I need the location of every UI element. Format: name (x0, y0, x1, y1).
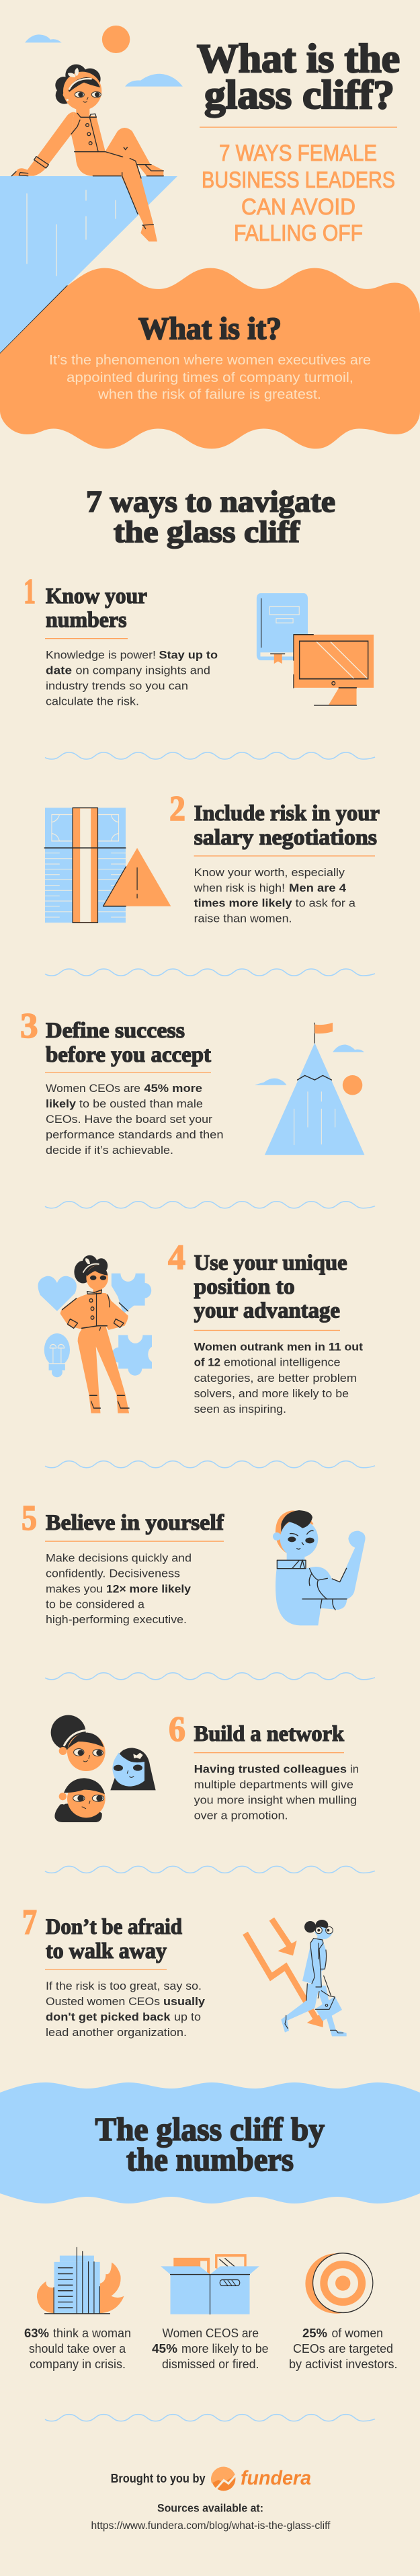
body 5: to be considered a (46, 1598, 145, 1610)
number 3: 3 (20, 1007, 38, 1046)
icon: burning building (37, 2247, 124, 2314)
item 3 (20, 1007, 364, 1157)
logo: fundera (211, 2467, 311, 2491)
heading 7 (46, 1915, 182, 1963)
body 2: raise than women. (194, 912, 292, 925)
body 1: calculate the risk. (46, 695, 139, 707)
body 5: 12× more likely (106, 1582, 192, 1595)
heading 4 (194, 1251, 347, 1323)
body 1: date (46, 664, 72, 676)
heading 4: position to (194, 1275, 295, 1299)
stat text (152, 2327, 269, 2371)
heading 7: to walk away (46, 1939, 167, 1963)
stat text: CEOs are targeted (293, 2342, 393, 2355)
title (197, 36, 400, 117)
face: top woman (51, 1715, 106, 1771)
definition text: appointed during times of company turmoil, (67, 370, 353, 385)
illustration: glass cliff (0, 176, 177, 354)
header illustration: sky (25, 26, 183, 87)
body 5: confidently. Decisiveness (46, 1567, 180, 1579)
panel: glass cliff by the numbers (0, 2082, 420, 2203)
item 1 (24, 572, 374, 707)
heading 4: Use your unique (194, 1251, 347, 1276)
heading 1 (46, 584, 147, 632)
heading: 7 ways (86, 484, 335, 549)
body 6 (194, 1763, 359, 1822)
stat text: by activist investors. (289, 2357, 398, 2371)
illustration: confident woman with puzzle pieces (38, 1255, 152, 1413)
body 4: solvers, and more likely to be (194, 1387, 349, 1400)
stat: 25 percent (289, 2253, 398, 2371)
stat text: more likely to be (181, 2342, 269, 2355)
body 3: decide if it’s achievable. (46, 1144, 173, 1157)
stat text (24, 2327, 131, 2371)
heading 2 (194, 802, 380, 850)
body 6: over a promotion. (194, 1809, 288, 1822)
blue wavy band (0, 2082, 420, 2203)
stat text (289, 2327, 398, 2371)
sources label: Sources available at: (157, 2501, 263, 2514)
body 1: on company insights and (75, 664, 210, 676)
stat: 45 percent (152, 2254, 269, 2371)
icon: left cloud (25, 34, 62, 42)
heading 3 (46, 1019, 211, 1067)
body 4: seen as inspiring. (194, 1403, 286, 1415)
body 3: likely (46, 1097, 77, 1110)
body 1 (46, 648, 218, 707)
body 7: Ousted women CEOs (46, 1995, 160, 2008)
illustration: woman sitting on cliff (11, 65, 163, 241)
body 2: Men are 4 (289, 882, 347, 894)
body 3: to be ousted than male (79, 1097, 203, 1110)
body 4: Women outrank men in 11 out (194, 1341, 363, 1353)
illustration: flexing woman (273, 1510, 366, 1625)
body 7: If the risk is too great, say so. (46, 1980, 202, 1992)
heading 4: your advantage (194, 1299, 340, 1323)
body 6: Having trusted colleagues (194, 1763, 347, 1776)
item 4 (38, 1239, 363, 1415)
body 3: CEOs. Have the board set your (46, 1113, 212, 1126)
number 2: 2 (169, 789, 185, 828)
subtitle: FALLING OFF (234, 221, 363, 246)
icon: sun (102, 26, 130, 53)
heading 1: numbers (46, 608, 127, 632)
body 4: of 12 (194, 1356, 220, 1368)
heading 2: salary negotiations (194, 826, 377, 850)
number 4: 4 (168, 1239, 185, 1278)
sources url: https://www.fundera.com/blog/what-is-the-glass-cliff (91, 2520, 331, 2532)
icon: paycheck and warning sign (44, 808, 171, 923)
definition text (49, 353, 371, 402)
body 4: categories, are better problem (194, 1372, 357, 1384)
body 3: performance standards and then (46, 1128, 223, 1141)
item 2 (44, 789, 380, 925)
face: bottom woman (54, 1778, 106, 1822)
item 6 (51, 1710, 359, 1822)
heading: 7 ways: the glass cliff (114, 514, 300, 549)
body 2: Know your worth, especially (194, 866, 345, 879)
face: blue woman (110, 1748, 156, 1790)
heading: by the numbers (95, 2111, 325, 2178)
body 6: you more insight when mulling (194, 1794, 357, 1806)
body 5: high-performing executive. (46, 1613, 187, 1626)
icon: moving box (161, 2254, 259, 2314)
body 4: emotional intelligence (224, 1356, 341, 1368)
heading: by the numbers: the numbers (126, 2141, 294, 2178)
title: glass cliff? (204, 73, 394, 117)
body 1: Knowledge is power! (46, 648, 156, 662)
stat text: think a woman (53, 2327, 131, 2340)
heading: by the numbers: The glass cliff by (95, 2111, 325, 2148)
definition text: when the risk of failure is greatest. (97, 387, 321, 402)
illustration: woman walking away with falling arrows (245, 1919, 347, 2036)
stat text: dismissed or fired. (162, 2357, 259, 2371)
body 5: makes you (46, 1582, 103, 1595)
number 7: 7 (22, 1903, 37, 1942)
subtitle: CAN AVOID (241, 194, 355, 220)
stat text: Women CEOS are (163, 2327, 259, 2340)
stat text: of women (332, 2327, 383, 2340)
body 2: times more likely (194, 897, 292, 910)
body 1: industry trends so you can (46, 679, 188, 692)
heading 3: before you accept (46, 1043, 211, 1067)
icon: mountain with flag (255, 1023, 364, 1155)
body 4 (194, 1341, 363, 1415)
body 3: Women CEOs are (46, 1082, 140, 1095)
stat text: 63% (24, 2327, 49, 2340)
body 7: lead another organization. (46, 2026, 187, 2039)
stat text: 25% (302, 2327, 327, 2340)
footer (91, 2467, 331, 2532)
stat text: should take over a (29, 2342, 126, 2355)
body 3 (46, 1082, 223, 1157)
body 7 (46, 1980, 206, 2039)
number 1: 1 (24, 572, 36, 611)
definition text: It’s the phenomenon where women executives are (49, 353, 371, 368)
body 6: multiple departments will give (194, 1779, 353, 1791)
icon: book and monitor (257, 593, 374, 705)
body 7: up to (174, 2011, 201, 2023)
heading 6: Build a network (194, 1722, 345, 1746)
body 3: 45% more (144, 1082, 202, 1095)
item 7 (22, 1903, 347, 2039)
heading 5: Believe in yourself (46, 1511, 224, 1535)
body 6: in (350, 1763, 359, 1776)
body 5: Make decisions quickly and (46, 1551, 192, 1564)
body 2: to ask for a (296, 897, 356, 910)
body 7: don't get picked back (46, 2011, 171, 2023)
panel: what is it (0, 268, 420, 448)
brought to you by: Brought to you by (111, 2472, 206, 2485)
subtitle: 7 WAYS FEMALE (219, 141, 377, 166)
icon: right cloud (125, 74, 183, 87)
illustration: three women's faces (51, 1715, 156, 1822)
heading 7: Don’t be afraid (46, 1915, 182, 1939)
number 5: 5 (22, 1499, 37, 1538)
orange wavy blob (0, 268, 420, 448)
body 7: usually (163, 1995, 206, 2008)
heading 2: Include risk in your (194, 802, 380, 826)
body 2 (194, 866, 356, 925)
stat text: company in crisis. (30, 2357, 126, 2371)
number 6: 6 (169, 1710, 185, 1749)
body 2: when risk is high! (194, 882, 285, 894)
item 5 (22, 1499, 366, 1626)
heading 3: Define success (46, 1019, 185, 1043)
stat text: 45% (152, 2342, 177, 2355)
body 5 (46, 1551, 192, 1626)
logo: fundera: fundera (241, 2467, 311, 2489)
stat: 63 percent (24, 2247, 131, 2371)
body 1: Stay up to (159, 648, 218, 662)
title: What is the (197, 36, 400, 81)
heading: what is it: What is it? (138, 311, 282, 346)
heading: 7 ways: 7 ways to navigate (86, 484, 335, 518)
heading 1: Know your (46, 584, 147, 609)
subtitle (202, 141, 395, 246)
icon: target (305, 2253, 373, 2314)
